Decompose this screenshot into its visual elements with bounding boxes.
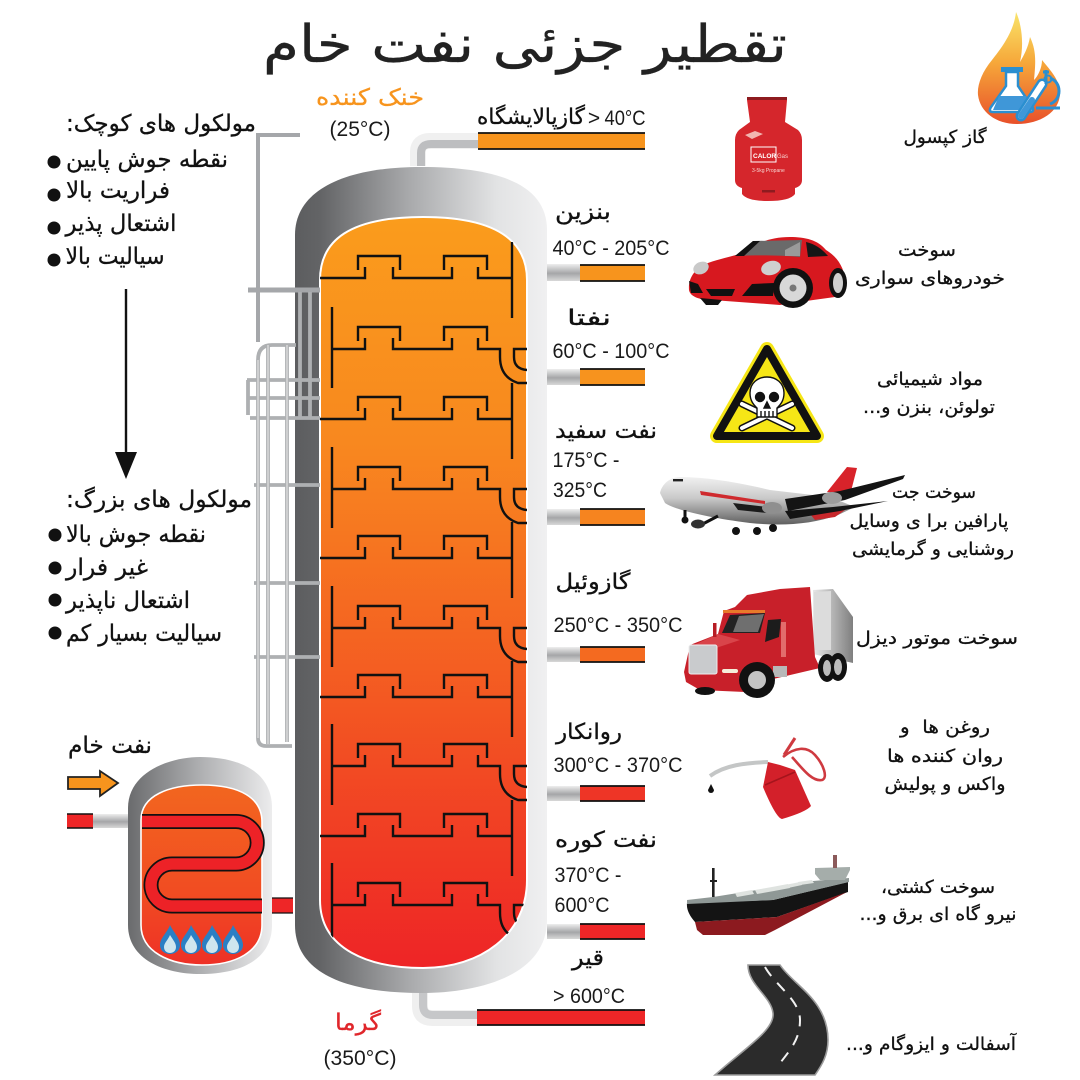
use: lubricants: روان کننده ها: [887, 746, 1003, 767]
large molecules list: نقطه جوش بالا: [66, 522, 206, 548]
small molecules list: فراریت بالا: [66, 178, 170, 204]
use: lubricants: روغن ها و: [899, 717, 990, 738]
coolant label: [316, 85, 424, 141]
bitumen label: قیر: [571, 946, 604, 971]
use: diesel fuel: سوخت موتور دیزل: [856, 628, 1018, 649]
use: car fuel: سوخت: [898, 240, 956, 261]
heat label: گرما: [335, 1009, 381, 1036]
kerosene label: 325°C: [553, 479, 607, 502]
small molecules list: [48, 111, 256, 270]
icon: gas cylinder: 3-5kg Propane: [752, 168, 785, 174]
icon: gas cylinder: [735, 97, 802, 201]
crude inlet pipe: [67, 814, 128, 828]
logo: flame with flask and microscope: [978, 12, 1060, 124]
ladder and platform: [247, 292, 320, 746]
refinery gas label: گازپالایشگاه: [477, 104, 586, 130]
refinery gas label: [477, 104, 646, 130]
small molecules list: مولکول های کوچک:: [66, 111, 256, 137]
use: marine fuel: نیرو گاه ای برق و...: [860, 903, 1016, 925]
fuel oil label: نفت کوره: [555, 828, 657, 853]
naphtha label: [552, 306, 670, 363]
column interior with heat gradient: [320, 217, 527, 968]
fuel oil label: 600°C: [554, 894, 610, 917]
small molecules list: اشتعال پذیر: [65, 211, 176, 237]
large molecules list: [48, 486, 252, 647]
icon: gas cylinder: CALOR: [753, 153, 776, 160]
icon: red sports car: [689, 237, 847, 308]
icon: jet airliner: [660, 467, 905, 535]
heat label: (350°C): [324, 1047, 396, 1070]
use: LPG: گاز کپسول: [904, 126, 987, 148]
use: jet fuel: پارافین برا ی وسایل: [850, 511, 1008, 532]
icon: bulk cargo ship: [687, 855, 850, 935]
gas oil label: [554, 569, 682, 637]
use: lubricants: [884, 717, 1006, 795]
gasoline label: 40°C - 205°C: [552, 237, 670, 260]
naphtha label: نفتا: [567, 306, 611, 331]
furnace: [128, 757, 272, 974]
distillation trays: [320, 242, 527, 944]
crude oil arrow: [68, 771, 118, 796]
use: asphalt: آسفالت و ایزوگام و...: [846, 1032, 1017, 1055]
crude oil label: نفت خام: [68, 733, 152, 759]
small molecules list: نقطه جوش پایین: [66, 147, 228, 173]
top overhead pipe: [418, 141, 480, 166]
title: تقطیر جزئی نفت خام: [263, 15, 787, 75]
kerosene label: نفت سفید: [555, 419, 657, 444]
column shell: [295, 167, 547, 993]
kerosene label: 175°C -: [552, 449, 620, 472]
lubricant label: 300°C - 370°C: [554, 754, 682, 777]
bitumen label: [553, 946, 625, 1008]
naphtha label: 60°C - 100°C: [552, 340, 670, 363]
coolant label: خنک کننده: [316, 85, 424, 111]
fuel oil label: 370°C -: [554, 864, 622, 887]
bitumen label: > 600°C: [553, 985, 625, 1008]
lubricant label: [554, 720, 682, 777]
use: chemicals: [863, 369, 995, 418]
large molecules list: اشتعال ناپذیر: [65, 588, 190, 614]
use: jet fuel: [850, 482, 1014, 560]
use: car fuel: [855, 240, 1005, 289]
use: chemicals: مواد شیمیائی: [877, 369, 983, 390]
icon: semi truck: [684, 587, 853, 698]
fuel oil label: [554, 828, 657, 917]
use: marine fuel: [860, 877, 1016, 925]
large molecules list: مولکول های بزرگ:: [66, 486, 252, 513]
kerosene label: [552, 419, 657, 502]
gasoline label: [552, 200, 670, 260]
heat label: [324, 1009, 396, 1070]
gas oil label: 250°C - 350°C: [554, 614, 682, 637]
refinery gas label: >: [588, 107, 600, 130]
heating coil: [142, 822, 262, 906]
small molecules list: سیالیت بالا: [66, 244, 164, 270]
bottom residue pipe: [420, 993, 480, 1018]
icon: toxic hazard sign: [717, 349, 817, 436]
icon: oil can: [708, 738, 825, 819]
burner flames: [160, 925, 243, 954]
product pipes: [477, 133, 645, 1025]
use: jet fuel: روشنایی و گرمایشی: [852, 538, 1014, 560]
use: marine fuel: سوخت کشتی،: [881, 877, 995, 898]
large molecules list: سیالیت بسیار کم: [66, 621, 222, 647]
icon: gas cylinder: Gas: [777, 154, 788, 160]
gasoline label: بنزین: [555, 200, 611, 225]
lubricant label: روانکار: [555, 720, 622, 745]
arrow: small to large molecules: [115, 289, 137, 479]
coolant label: (25°C): [330, 118, 390, 141]
use: car fuel: خودروهای سواری: [855, 268, 1005, 289]
coolant pipe: [248, 135, 320, 342]
icon: curved road: [715, 965, 828, 1075]
use: jet fuel: سوخت جت: [892, 482, 976, 503]
use: chemicals: تولوئن، بنزن و...: [863, 397, 995, 418]
gas oil label: گازوئیل: [556, 569, 631, 595]
large molecules list: غیر فرار: [65, 555, 148, 581]
furnace to column pipe: [272, 898, 293, 913]
refinery gas label: 40°C: [604, 107, 646, 130]
use: lubricants: واکس و پولیش: [884, 774, 1006, 795]
